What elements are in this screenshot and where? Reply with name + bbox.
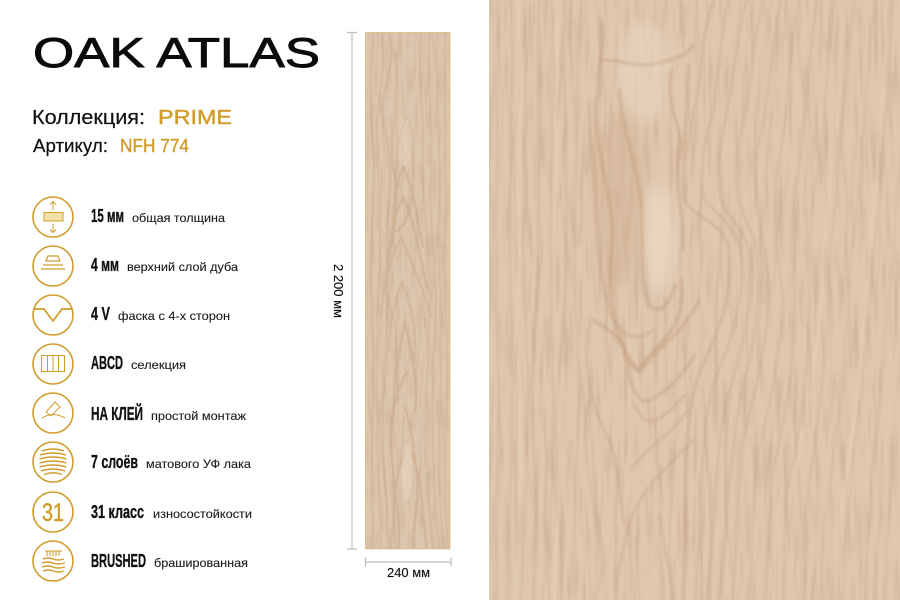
collection line <box>32 107 232 129</box>
article line: Артикул: <box>33 136 108 156</box>
collection line: Коллекция: <box>32 107 145 129</box>
label: 15 mm: 15 мм <box>91 206 124 226</box>
spec: bevel <box>33 295 230 335</box>
label: 4 V: 4 V <box>91 304 110 324</box>
description: total thickness: общая толщина <box>132 211 225 225</box>
label: ABCD: ABCD <box>91 353 123 373</box>
icon: glue spatula <box>33 393 73 433</box>
icon: thickness arrows <box>33 197 73 237</box>
description: simple install: простой монтаж <box>151 409 246 423</box>
label: class 31: 31 класс <box>91 502 144 522</box>
icon: lacquer layers <box>33 442 73 482</box>
icon: V bevel <box>33 295 73 335</box>
article line <box>33 136 189 156</box>
oak texture close-up <box>489 0 900 600</box>
description: selection: селекция <box>131 358 186 372</box>
spec: glue <box>33 393 246 433</box>
description: matte UV lacquer: матового УФ лака <box>146 457 251 471</box>
spec: grade <box>33 344 186 384</box>
spec: wear class <box>33 492 252 532</box>
title: OAK ATLAS <box>33 29 320 76</box>
height dimension <box>331 32 357 549</box>
plank <box>365 32 450 549</box>
label: 4 mm: 4 мм <box>91 255 119 275</box>
article line: NFH 774 <box>120 136 189 156</box>
icon: class 31: 31 <box>42 499 64 527</box>
icon: top oak layer <box>33 246 73 286</box>
icon: class 31 <box>33 492 73 532</box>
description: wear resistance: износостойкости <box>153 507 252 521</box>
description: four-side bevel: фаска с 4-х сторон <box>118 309 230 323</box>
spec: lacquer <box>33 442 251 482</box>
label: 7 layers: 7 слоёв <box>91 452 138 472</box>
description: top oak layer: верхний слой дуба <box>127 260 238 274</box>
height dimension: 2 200 мм <box>331 264 345 318</box>
spec: thickness <box>33 197 225 237</box>
icon: brushed surface <box>33 541 73 581</box>
cathedral centre <box>596 20 682 372</box>
left straight grain <box>496 0 498 600</box>
soft tonal patches <box>598 116 640 284</box>
spec list <box>33 197 252 581</box>
width dimension <box>366 558 451 580</box>
description: brushed in Russian: брашированная <box>154 556 248 570</box>
icon: planks selection <box>33 344 73 384</box>
collection line: PRIME <box>158 107 232 129</box>
spec: brushed <box>33 541 248 581</box>
label: brushed: BRUSHED <box>91 551 146 571</box>
right sweeping grain <box>683 0 730 600</box>
width dimension: 240 мм <box>387 566 430 580</box>
spec: oak layer <box>33 246 238 286</box>
label: glue down: НА КЛЕЙ <box>91 403 143 424</box>
